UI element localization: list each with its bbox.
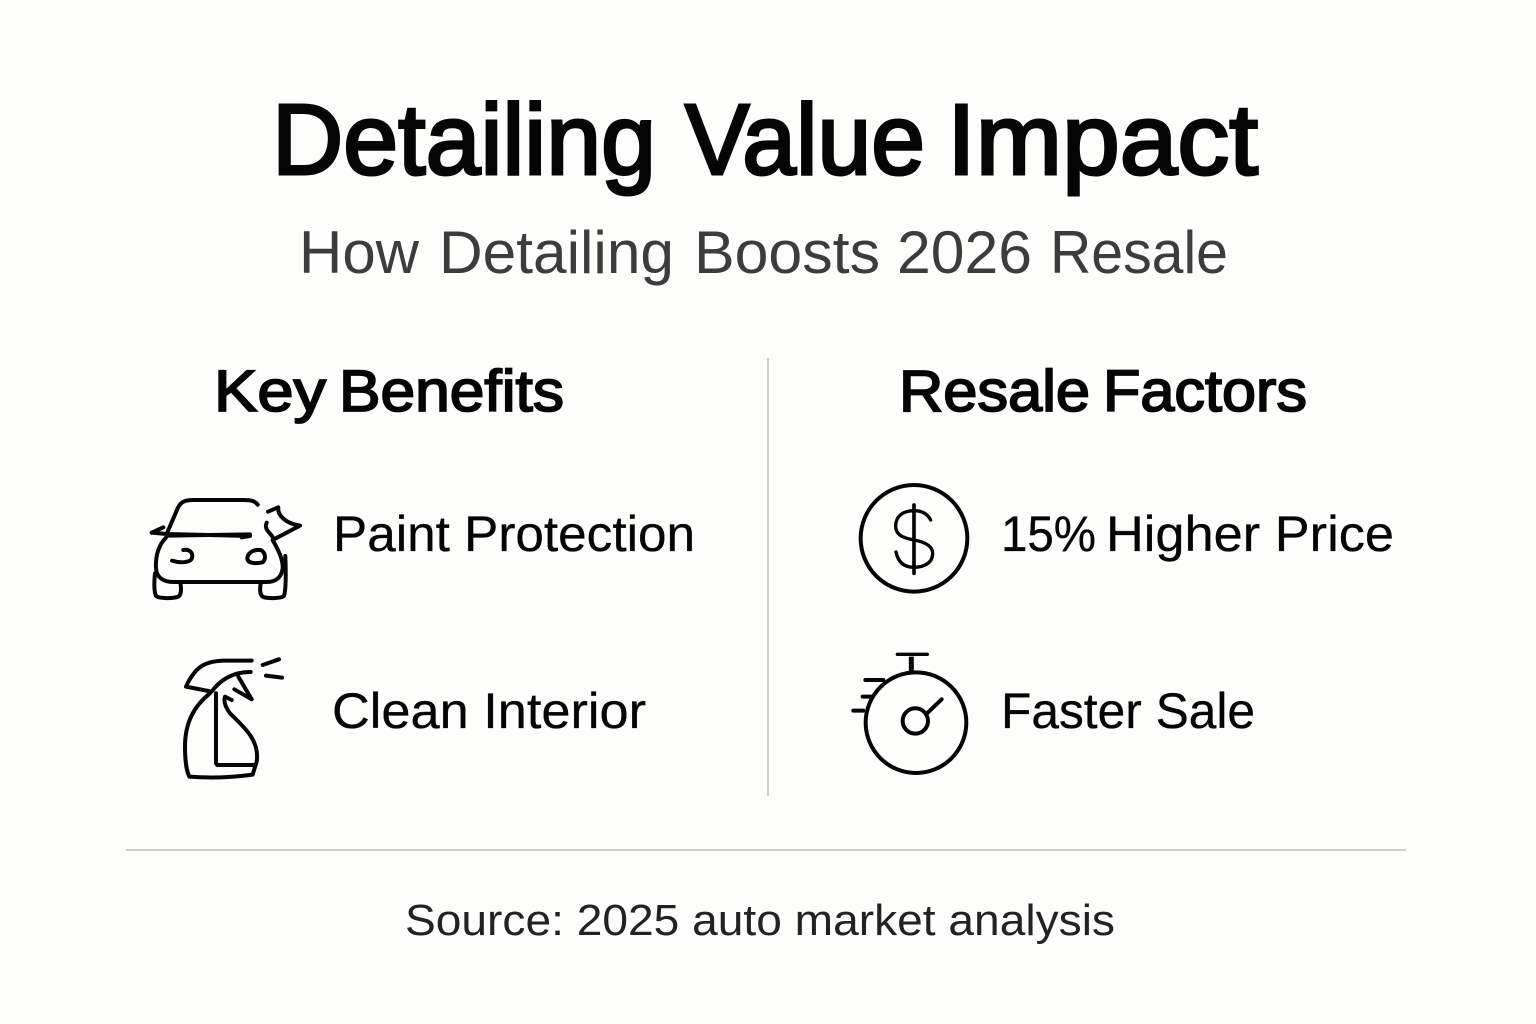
- title: Impact: [947, 84, 1258, 196]
- heading: resale factors: Factors: [1103, 359, 1307, 424]
- footer divider: [126, 849, 1406, 851]
- subtitle: Detailing: [439, 219, 674, 286]
- heading: resale factors: Resale: [899, 359, 1090, 424]
- title: [272, 84, 1258, 196]
- icon: spray bottle: [185, 659, 282, 777]
- panel: resale factors: [853, 359, 1394, 773]
- subtitle: [299, 219, 1228, 286]
- subtitle: Boosts: [694, 219, 880, 286]
- heading: key benefits: Benefits: [339, 359, 564, 424]
- title: Detailing: [272, 84, 656, 196]
- heading: key benefits: [214, 359, 564, 424]
- icon: car with paint shine: [152, 500, 300, 598]
- label: paint protection: Paint Protection: [333, 506, 695, 562]
- subtitle: How: [299, 219, 420, 286]
- heading: key benefits: Key: [214, 359, 326, 424]
- column divider: [767, 358, 769, 796]
- icon: dollar coin: [861, 485, 967, 592]
- label: 15% higher price: 15%: [1001, 506, 1096, 562]
- source note: Source: 2025 auto market analysis: [405, 896, 1115, 945]
- label: faster sale: Faster Sale: [1001, 683, 1255, 739]
- subtitle: 2026: [897, 219, 1032, 286]
- icon: stopwatch: [853, 654, 966, 773]
- subtitle: Resale: [1050, 219, 1228, 286]
- title: Value: [685, 84, 925, 196]
- heading: resale factors: [899, 359, 1307, 424]
- label: clean interior: Clean Interior: [332, 683, 646, 739]
- label: 15% higher price: Higher Price: [1106, 506, 1394, 562]
- panel: key benefits: [152, 359, 695, 777]
